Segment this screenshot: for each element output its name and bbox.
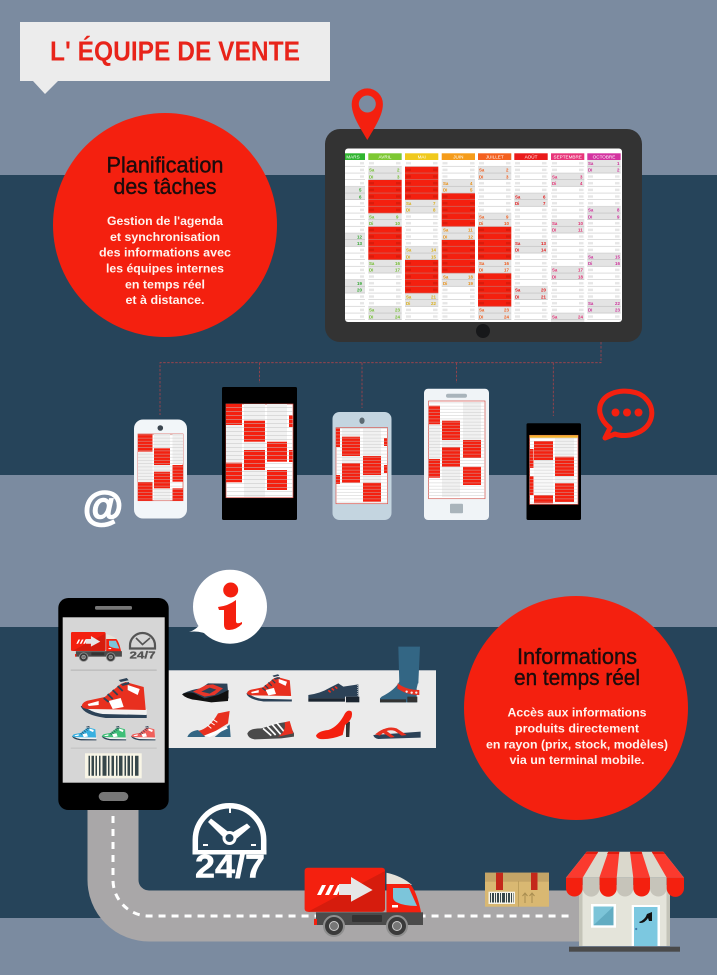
weekend day labels [357,161,620,319]
weekend day labels: 24 [395,314,400,319]
shoe: ankle boot with strap [380,647,420,702]
shoe: grey striped sneaker [247,721,294,739]
month headers: AVRIL [379,154,392,159]
weekend day labels: 24 [578,314,583,319]
weekend day labels: Sa [369,261,375,266]
icon: chat bubble [600,391,652,438]
weekend day labels: Di [552,228,556,233]
shoes: left group [182,683,294,739]
icon: info letter i [218,582,242,630]
weekend day labels: 10 [504,221,509,226]
weekend day labels: 17 [578,268,583,273]
weekend day labels: 16 [615,261,620,266]
weekend day labels: Di [515,294,519,299]
weekend day labels: 22 [615,301,620,306]
weekend day labels: 21 [541,294,546,299]
weekend day labels: Di [406,254,410,259]
month headers: JUIN [453,154,463,159]
weekend day labels: Di [369,221,373,226]
weekend day labels: 2 [617,168,620,173]
barcode [85,753,142,778]
weekend day labels: 5 [359,188,362,193]
calendar [345,153,621,322]
weekend day labels: 8 [433,208,436,213]
weekend day labels: 15 [431,254,436,259]
weekend day labels: 18 [578,274,583,279]
shop window [591,904,616,928]
parcel barcode [488,892,515,904]
connector lines: tablet to devices [160,342,601,416]
weekend rows [345,160,621,322]
weekend day labels: 23 [504,308,509,313]
weekend day labels: Di [515,201,519,206]
body text: planification: et synchronisation [110,230,220,244]
weekend day labels: 16 [504,261,509,266]
weekend day labels: 3 [506,174,509,179]
weekend day labels: Sa [443,274,449,279]
weekend day labels: 7 [543,201,546,206]
title banner [20,22,330,94]
weekend day labels: 21 [431,294,436,299]
body text: planification: les équipes internes [106,262,224,276]
month headers: MARS [346,154,360,159]
weekend day labels: 15 [615,254,620,259]
weekend day labels: 20 [541,288,546,293]
weekend day labels: Sa [479,308,485,313]
heading: planification: Planification [106,153,224,178]
shoe: sandal [373,727,421,739]
weekend day labels: Sa [479,214,485,219]
weekend day labels: 11 [578,228,583,233]
shoe: navy derby [308,683,359,702]
body text: planification: des informations avec [99,246,231,260]
body text: informations: Accès aux informations [508,706,647,720]
device: blue-grey phone [332,412,392,520]
weekend day labels: 18 [468,274,473,279]
shop [566,852,684,952]
weekend day labels: Sa [552,314,558,319]
busy row labels [369,167,510,307]
weekend day labels: 23 [395,308,400,313]
weekend day labels: 4 [580,181,583,186]
mobile terminal [58,598,169,810]
body text: planification: Gestion de l'agenda [107,214,223,228]
weekend day labels: Di [515,248,519,253]
weekend day labels: Sa [515,194,521,199]
device: small black phone [526,423,581,520]
faint weekday entries [360,160,620,320]
month headers: JUILLET [486,154,504,159]
weekend day labels: Sa [552,221,558,226]
weekend day labels: Sa [406,248,412,253]
weekend day labels: Sa [588,254,594,259]
weekend day labels: 6 [543,194,546,199]
weekend day labels: Di [443,188,447,193]
weekend day labels: 14 [431,248,436,253]
red busy blocks [368,167,511,307]
weekend day labels: Sa [588,208,594,213]
weekend day labels: Di [588,168,592,173]
icon: 24/7 clock [192,806,266,884]
weekend day labels: Di [588,261,592,266]
weekend day labels: Di [479,221,483,226]
weekend day labels: 24 [504,314,509,319]
weekend day labels: 10 [578,221,583,226]
weekend day labels: Di [406,208,410,213]
weekend day labels: Di [588,214,592,219]
weekend day labels: Di [479,314,483,319]
weekend day labels: 4 [470,181,473,186]
icon: small 24/7 clock [130,633,156,661]
icon: small 24/7 clock: 24/7 [130,649,156,661]
weekend day labels: Sa [369,308,375,313]
device: small white phone [134,420,187,518]
body text: planification [99,214,231,307]
icon: at sign: @ [83,483,123,529]
device: tall white phone [424,389,489,520]
weekend day labels: Sa [369,214,375,219]
body text: informations: en rayon (prix, stock, modèles) [486,737,668,751]
weekend day labels: 16 [395,261,400,266]
row lines [345,160,621,322]
weekend day labels: 23 [615,308,620,313]
striped awning [566,852,684,897]
weekend day labels: Di [369,174,373,179]
weekend day labels: 12 [468,234,473,239]
weekend day labels: 12 [357,234,362,239]
icon: location pin [352,88,383,140]
heading: informations: en temps réel [514,665,640,690]
weekend day labels: 2 [397,168,400,173]
title text: L' ÉQUIPE DE VENTE [50,36,300,67]
device: large black phone [222,387,297,520]
weekend day labels: Sa [406,294,412,299]
weekend day labels: Sa [369,168,375,173]
weekend day labels: 20 [357,288,362,293]
shoe: featured sneaker [81,678,147,718]
home button [476,324,490,338]
weekend day labels: 13 [357,241,362,246]
weekend day labels: Sa [443,228,449,233]
weekend day labels: 19 [357,281,362,286]
weekend day labels: 11 [468,228,473,233]
shoe: green variant [102,726,126,740]
shoe: blue variant [72,726,96,740]
shoe: pink variant [131,726,155,740]
weekend day labels: 2 [506,168,509,173]
24/7 label: 24/7 [195,848,265,884]
weekend day labels: Di [479,268,483,273]
heading: planification [106,153,224,199]
heading: planification: des tâches [114,174,216,199]
shoe: red hightop [246,674,292,702]
weekend day labels: Di [443,281,447,286]
weekend day labels: Sa [443,181,449,186]
month headers: MAI [418,154,426,159]
body text: informations: via un terminal mobile. [510,753,644,767]
weekend day labels: 10 [395,221,400,226]
heading: informations [514,644,640,690]
weekend day labels: 9 [506,214,509,219]
weekend day labels: 17 [504,268,509,273]
month headers: AOÛT [525,153,538,159]
weekend day labels: 17 [395,268,400,273]
weekend day labels: 3 [397,174,400,179]
icon: small truck [71,632,122,661]
parcel [485,873,549,907]
weekend day labels: 13 [541,241,546,246]
weekend day labels: 5 [470,188,473,193]
weekend day labels: 7 [433,201,436,206]
weekend day labels: Di [552,181,556,186]
weekend day labels: Di [369,314,373,319]
weekend day labels: 1 [617,161,620,166]
shoe: red high heel [316,711,352,739]
weekend day labels: 6 [359,194,362,199]
month headers: OCTOBRE [593,154,615,159]
info speech bubble [189,570,267,644]
weekend day labels: 14 [541,248,546,253]
tablet with calendar [325,129,642,342]
heading: informations: Informations [517,644,637,669]
delivery road [113,805,590,916]
weekend day labels: Sa [552,268,558,273]
weekend day labels: 9 [617,214,620,219]
delivery truck [305,868,423,936]
weekend day labels: Sa [515,241,521,246]
body text: planification: et à distance. [126,293,204,307]
weekend day labels: Di [443,234,447,239]
shop door [632,905,660,946]
weekend day labels: 22 [431,301,436,306]
weekend day labels: Sa [406,201,412,206]
weekend day labels: Sa [515,288,521,293]
weekend day labels: Di [588,308,592,313]
weekend day labels: Di [479,174,483,179]
weekend day labels: 9 [396,214,399,219]
weekend day labels: Sa [479,168,485,173]
shoe: high boot [187,711,231,737]
weekend day labels: 19 [468,281,473,286]
shoes: right group [308,647,421,739]
panel: shoe catalogue [168,647,436,748]
month headers: SEPTEMBRE [554,154,582,159]
body text: informations: produits directement [515,722,639,736]
weekend day labels: Sa [479,261,485,266]
weekend day labels: Di [552,274,556,279]
weekend day labels: Di [369,268,373,273]
weekend day labels: 8 [617,208,620,213]
weekend day labels: Sa [588,301,594,306]
panel: informations en temps réel [464,596,688,820]
shoe: black running [182,683,229,702]
weekend day labels: Di [406,301,410,306]
weekend day labels: Sa [552,174,558,179]
weekend day labels: Sa [588,161,594,166]
month headers [345,153,621,160]
panel: planification des tâches [53,113,277,337]
body text: informations [486,706,668,767]
weekend day labels: 3 [580,174,583,179]
body text: planification: en temps réel [125,278,205,292]
